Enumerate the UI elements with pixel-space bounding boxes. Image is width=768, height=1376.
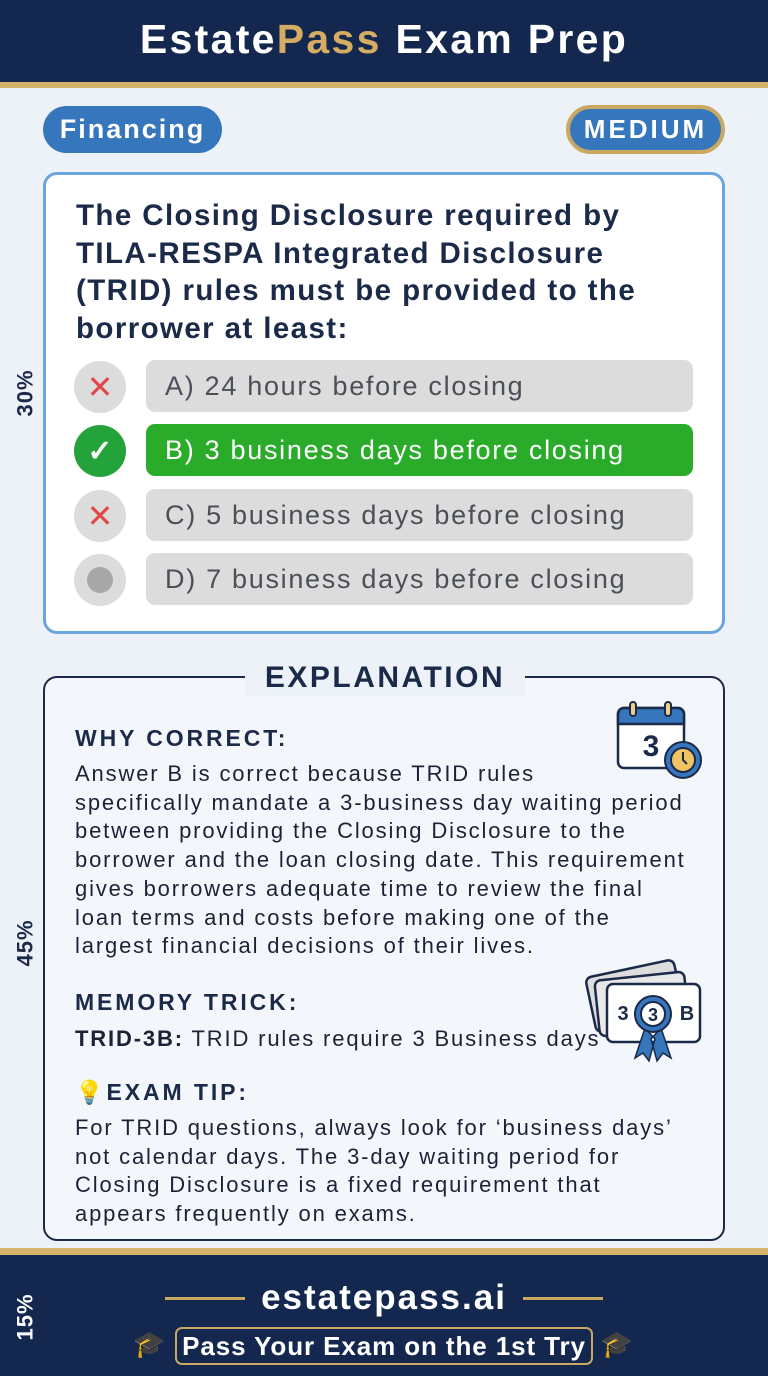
icon: ribbon cards: 3 [648, 1005, 658, 1025]
text: exam tip [75, 1115, 673, 1226]
text: A) 24 hours before closing [165, 371, 524, 401]
tagline: Pass Your Exam on the 1st Try [182, 1331, 586, 1361]
option C [74, 489, 693, 542]
text: why correct: Answer B is correct because TRID rules [75, 761, 535, 786]
text: why correct: borrower and the loan closing date. This requirement [75, 847, 686, 872]
pill: category [43, 106, 222, 153]
icon: ribbon cards [585, 959, 702, 1062]
question text: TILA-RESPA Integrated Disclosure [76, 236, 604, 270]
option D [74, 553, 693, 606]
panel: explanation [43, 676, 725, 1241]
text: why correct: gives borrowers adequate time to review the final [75, 876, 644, 901]
icon: wrong: ✕ [87, 498, 113, 534]
footer brand [165, 1278, 603, 1317]
icon: grad caps [133, 1329, 633, 1359]
title: EstatePass Exam Prep [140, 16, 628, 62]
text: why correct: between providing the Closing Disclosure to the [75, 818, 627, 843]
footer brand: estatepass.ai [261, 1278, 507, 1317]
text: why correct [75, 761, 686, 958]
text: D) 7 business days before closing [165, 564, 626, 594]
icon: grad caps: 🎓 [133, 1329, 165, 1359]
footer [0, 1248, 768, 1376]
icon: check: ✓ [87, 434, 113, 468]
pill: difficulty [566, 105, 725, 154]
text: why correct: loan terms and costs before making one of the [75, 905, 611, 930]
option A [74, 360, 693, 413]
question text: The Closing Disclosure required by [76, 199, 620, 232]
question text [76, 199, 636, 344]
icon: calendar: 3 [643, 730, 659, 763]
icon: calendar [616, 701, 702, 779]
pill: category: Financing [60, 114, 205, 144]
heading: memory trick: MEMORY TRICK: [75, 989, 299, 1015]
icon: wrong: ✕ [87, 369, 113, 405]
heading: exam tip: 💡EXAM TIP: [75, 1079, 249, 1105]
side label 45%: 45% [13, 919, 38, 967]
icon: neutral [74, 554, 126, 606]
text: exam tip: Closing Disclosure is a fixed requirement that [75, 1172, 602, 1197]
text: exam tip: appears frequently on exams. [75, 1201, 417, 1226]
heading: explanation: EXPLANATION [265, 661, 505, 694]
heading: why correct: WHY CORRECT: [75, 725, 288, 751]
text: memory trick: TRID-3B: TRID rules require 3 Business days [75, 1026, 600, 1051]
text: exam tip: For TRID questions, always look for ‘business days’ [75, 1115, 673, 1140]
icon: wrong [74, 361, 126, 413]
icon: wrong [74, 490, 126, 542]
text: C) 5 business days before closing [165, 500, 626, 530]
icon: check [74, 425, 126, 477]
text: why correct: specifically mandate a 3-business day waiting period [75, 790, 684, 815]
icon: ribbon cards: 3 [617, 1003, 629, 1025]
question text: borrower at least: [76, 312, 349, 344]
text: why correct: largest financial decisions of their lives. [75, 933, 535, 958]
icon: grad caps: 🎓 [601, 1329, 633, 1359]
pill: difficulty: MEDIUM [584, 114, 707, 144]
text: exam tip: not calendar days. The 3-day waiting period for [75, 1144, 620, 1169]
option B correct [74, 424, 693, 477]
side label 30%: 30% [13, 369, 38, 417]
side label 15%: 15% [13, 1293, 38, 1341]
question text: (TRID) rules must be provided to the [76, 274, 636, 307]
icon: ribbon cards: B [680, 1003, 694, 1025]
text: B) 3 business days before closing [165, 435, 625, 465]
panel: question [43, 172, 725, 634]
header [0, 0, 768, 88]
